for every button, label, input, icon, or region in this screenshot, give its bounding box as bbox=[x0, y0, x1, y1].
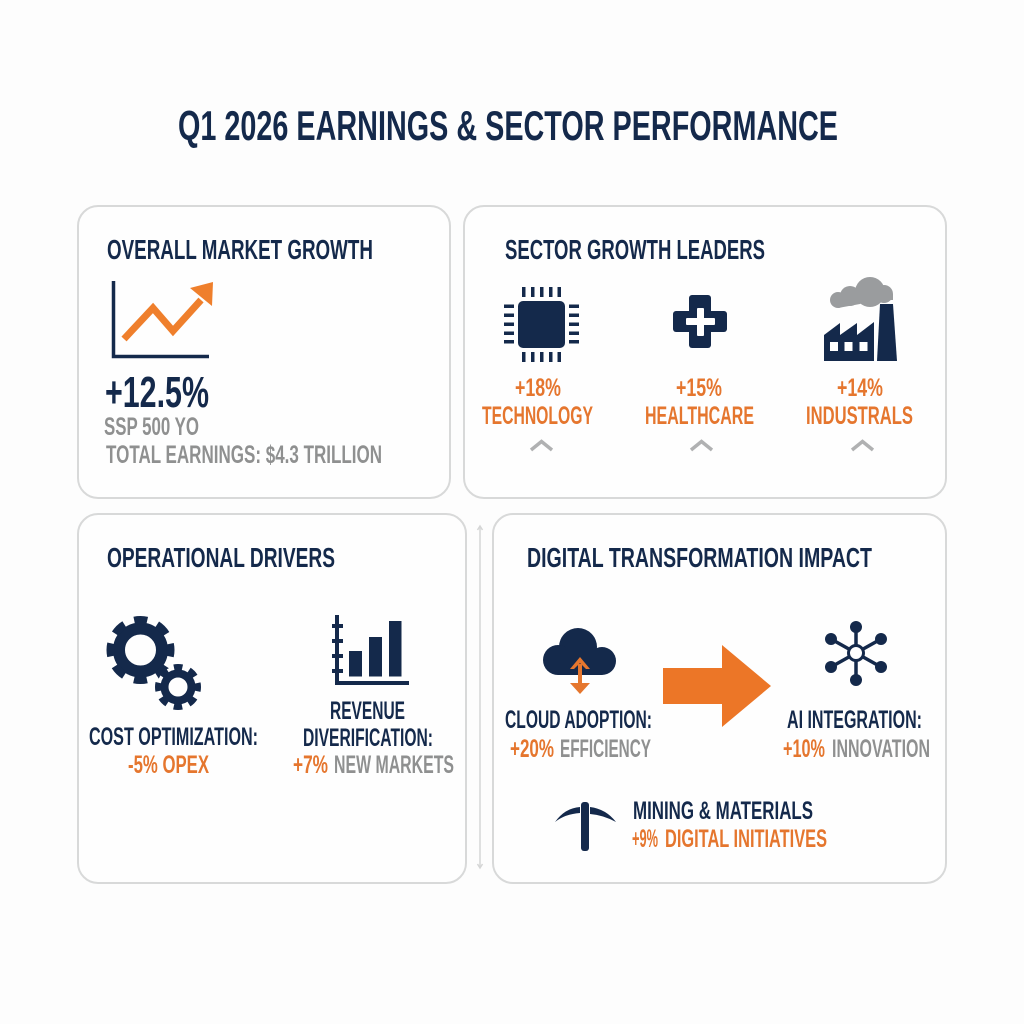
icon: gears bbox=[110, 620, 199, 708]
arrow: cloud to AI bbox=[663, 645, 771, 727]
text: revenue diversification: REVENUE bbox=[330, 697, 405, 725]
stat: technology: +18% bbox=[515, 374, 561, 402]
panel: overall market growth bbox=[78, 206, 450, 498]
heading: operational drivers: OPERATIONAL DRIVERS bbox=[107, 542, 335, 573]
stat: industrials: INDUSTRALS bbox=[806, 402, 913, 430]
stat: industrials: +14% bbox=[837, 374, 883, 402]
text: cost optimization: -5% OPEX bbox=[128, 751, 209, 779]
connector: vertical divider bbox=[478, 526, 482, 868]
stat: technology bbox=[482, 374, 593, 430]
text: revenue diversification: +7% bbox=[293, 751, 328, 779]
icon: cloud with transfer arrow bbox=[543, 628, 616, 694]
stat: healthcare bbox=[645, 374, 754, 430]
text: AI integration: INNOVATION bbox=[832, 735, 930, 763]
heading: digital transformation impact: DIGITAL TRANSFORMATION IMPACT bbox=[527, 542, 872, 573]
label: S&P 500 YoY: SSP 500 YO bbox=[104, 413, 199, 441]
icon: AI network bbox=[825, 621, 887, 686]
stat: healthcare: HEALTHCARE bbox=[645, 402, 754, 430]
icon: medical cross bbox=[673, 295, 727, 348]
heading: sector growth leaders: SECTOR GROWTH LEADERS bbox=[505, 234, 765, 265]
text: revenue diversification: NEW MARKETS bbox=[334, 751, 454, 779]
text: mining and materials bbox=[632, 797, 827, 853]
text: mining and materials: +9% bbox=[632, 825, 658, 853]
icon: bar chart bbox=[332, 615, 409, 685]
label: total earnings: TOTAL EARNINGS: $4.3 TRILLION bbox=[106, 441, 382, 469]
text: AI integration: +10% bbox=[783, 735, 825, 763]
icon: microchip bbox=[504, 287, 579, 362]
text: cost optimization: COST OPTIMIZATION: bbox=[89, 723, 258, 751]
text: cloud adoption: +20% bbox=[510, 735, 554, 763]
stat: healthcare: +15% bbox=[676, 374, 722, 402]
text: mining and materials: MINING & MATERIALS bbox=[633, 797, 813, 825]
heading: overall market growth: OVERALL MARKET GROWTH bbox=[107, 234, 373, 265]
text: revenue diversification: DIVERIFICATION: bbox=[303, 724, 433, 752]
icon: factory with smoke bbox=[824, 277, 897, 361]
stat: technology: TECHNOLOGY bbox=[482, 402, 593, 430]
text: cost optimization bbox=[89, 723, 258, 779]
text: AI integration bbox=[783, 706, 930, 763]
text: AI integration: AI INTEGRATION: bbox=[787, 706, 922, 734]
text: revenue diversification bbox=[293, 697, 454, 779]
text: cloud adoption: EFFICIENCY bbox=[560, 735, 651, 763]
panel: sector growth leaders bbox=[464, 206, 946, 498]
text: cloud adoption bbox=[505, 706, 652, 763]
stat: +12.5%: +12.5% bbox=[105, 368, 209, 417]
icon: pickaxe bbox=[555, 802, 616, 851]
text: cloud adoption: CLOUD ADOPTION: bbox=[505, 706, 652, 734]
icon: rising line chart bbox=[114, 281, 213, 356]
icons: up chevrons bbox=[531, 442, 873, 450]
stat: industrials bbox=[806, 374, 913, 430]
text: mining and materials: DIGITAL INITIATIVES bbox=[665, 825, 827, 853]
panel: digital transformation impact bbox=[493, 514, 946, 883]
panel: operational drivers bbox=[78, 514, 466, 883]
